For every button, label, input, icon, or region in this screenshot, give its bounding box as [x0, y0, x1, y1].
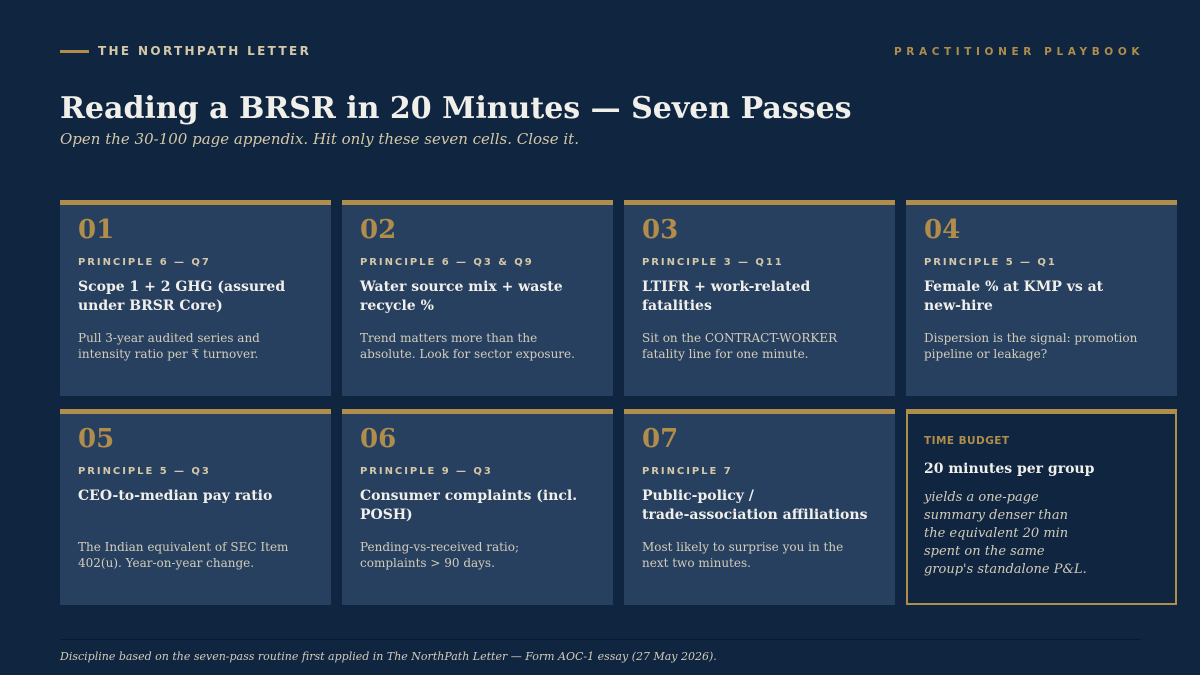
description: 402(u). Year-on-year change.	[78, 556, 254, 570]
footer note: Discipline based on the seven-pass routine first applied in The NorthPath Letter — Form AOC-1 essay (27 May 2026).	[60, 650, 717, 663]
subtitle: Open the 30-100 page appendix. Hit only these seven cells. Close it.	[60, 130, 579, 148]
section tag: PRACTITIONER PLAYBOOK	[894, 46, 1144, 58]
panel: card 03	[624, 200, 895, 396]
description: pipeline or leakage?	[924, 347, 1047, 361]
heading: POSH)	[360, 507, 413, 523]
heading: Water source mix + waste	[360, 279, 563, 295]
principle: PRINCIPLE 5 — Q3	[78, 466, 211, 477]
panel: card 01	[60, 200, 331, 396]
footer rule	[60, 639, 1141, 640]
brand rule	[60, 50, 89, 53]
description: Pending-vs-received ratio;	[360, 540, 519, 554]
heading: trade-association affiliations	[642, 507, 867, 523]
description: group's standalone P&L.	[924, 562, 1087, 577]
description: Dispersion is the signal: promotion	[924, 331, 1137, 345]
number: 04	[924, 215, 960, 245]
label: TIME BUDGET	[924, 435, 1010, 447]
heading: Scope 1 + 2 GHG (assured	[78, 279, 285, 295]
description: fatality line for one minute.	[642, 347, 808, 361]
panel: card 05	[60, 409, 331, 605]
heading	[78, 279, 285, 314]
heading: Public-policy /	[642, 488, 754, 504]
description: The Indian equivalent of SEC Item	[78, 540, 288, 554]
description: Most likely to surprise you in the	[642, 540, 843, 554]
heading	[360, 279, 563, 314]
number: 01	[78, 215, 114, 245]
heading	[360, 488, 577, 523]
number: 06	[360, 424, 396, 454]
panel: card 06	[342, 409, 613, 605]
number: 05	[78, 424, 114, 454]
heading: Consumer complaints (incl.	[360, 488, 577, 504]
description	[924, 331, 1138, 361]
description: Pull 3-year audited series and	[78, 331, 260, 345]
number: 02	[360, 215, 396, 245]
principle: PRINCIPLE 9 — Q3	[360, 466, 493, 477]
description	[360, 331, 575, 361]
number: 07	[642, 424, 678, 454]
panel: card 07	[624, 409, 895, 605]
description	[78, 331, 260, 361]
description	[360, 540, 519, 570]
principle: PRINCIPLE 3 — Q11	[642, 257, 784, 268]
number: 03	[642, 215, 678, 245]
description: next two minutes.	[642, 556, 751, 570]
principle: PRINCIPLE 5 — Q1	[924, 257, 1057, 268]
heading: new-hire	[924, 298, 993, 314]
description: Sit on the CONTRACT-WORKER	[642, 331, 837, 345]
brand name: THE NORTHPATH LETTER	[98, 44, 311, 58]
panel: card 02	[342, 200, 613, 396]
heading: CEO-to-median pay ratio	[78, 488, 272, 504]
panel: time budget	[906, 409, 1177, 605]
description: yields a one-page	[924, 490, 1039, 505]
description	[924, 490, 1087, 577]
description: summary denser than	[924, 508, 1068, 523]
heading	[642, 488, 867, 523]
panel: card 04	[906, 200, 1177, 396]
principle: PRINCIPLE 7	[642, 466, 733, 477]
description: Trend matters more than the	[360, 331, 537, 345]
description: the equivalent 20 min	[924, 526, 1068, 541]
description	[642, 540, 843, 570]
description: intensity ratio per ₹ turnover.	[78, 347, 258, 361]
heading: Female % at KMP vs at	[924, 279, 1103, 295]
description: absolute. Look for sector exposure.	[360, 347, 575, 361]
heading	[642, 279, 810, 314]
heading: LTIFR + work-related	[642, 279, 810, 295]
heading: recycle %	[360, 298, 434, 314]
principle: PRINCIPLE 6 — Q7	[78, 257, 211, 268]
heading: under BRSR Core)	[78, 298, 223, 314]
title: Reading a BRSR in 20 Minutes — Seven Passes	[60, 91, 852, 126]
description: spent on the same	[924, 544, 1045, 559]
heading	[924, 279, 1103, 314]
principle: PRINCIPLE 6 — Q3 & Q9	[360, 257, 534, 268]
description: complaints > 90 days.	[360, 556, 495, 570]
description	[78, 540, 288, 570]
heading: fatalities	[642, 298, 712, 314]
heading: 20 minutes per group	[924, 461, 1094, 477]
description	[642, 331, 838, 361]
